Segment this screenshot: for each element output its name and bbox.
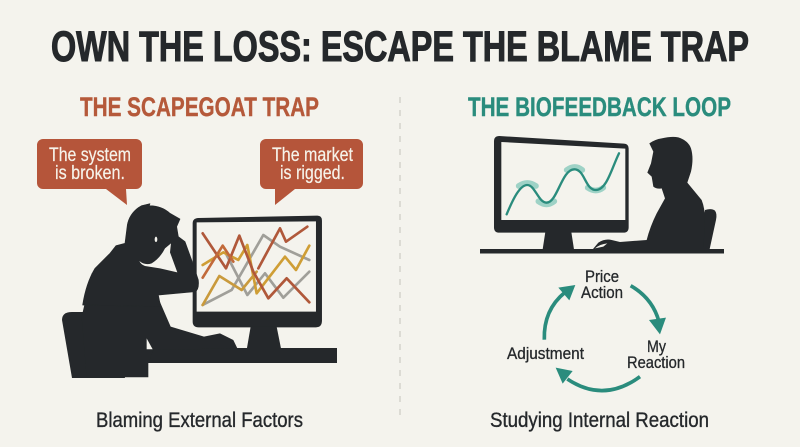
speech bubble: the system is broken: is broken. xyxy=(55,163,125,184)
person lower body xyxy=(82,273,237,377)
arrow: my reaction to adjustment xyxy=(556,368,640,391)
label: price action: Price xyxy=(585,267,619,286)
label: price action xyxy=(581,267,623,302)
label: my reaction: Reaction xyxy=(627,353,685,372)
caption: blaming external factors: Blaming External Factors xyxy=(96,409,303,432)
panel: biofeedback loop xyxy=(468,92,731,432)
desk xyxy=(480,249,724,254)
speech bubble: the system is broken xyxy=(37,139,142,205)
label: adjustment: Adjustment xyxy=(507,344,584,363)
panel: scapegoat trap xyxy=(37,92,363,432)
arrow: price action to my reaction xyxy=(631,286,666,334)
monitor xyxy=(494,136,629,249)
speech bubble: the system is broken: The system xyxy=(49,145,131,166)
arrow: adjustment to price action xyxy=(544,285,575,340)
label: price action: Action xyxy=(581,283,623,302)
icon: calm person at monitor with smooth chart xyxy=(480,136,724,254)
label: my reaction xyxy=(627,337,685,372)
speech bubble: the market is rigged: is rigged. xyxy=(280,163,345,184)
desk xyxy=(147,348,337,363)
caption: studying internal reaction: Studying Internal Reaction xyxy=(490,409,709,432)
speech bubble: the market is rigged: The market xyxy=(272,145,354,166)
cycle diagram xyxy=(544,285,666,391)
chaotic line chart xyxy=(203,227,309,305)
person upper body and head xyxy=(83,204,199,307)
smooth chart with highlights xyxy=(507,153,619,214)
chair xyxy=(62,312,125,378)
speech bubble: the market is rigged xyxy=(260,139,363,205)
icon: stressed person at monitor with chaotic chart xyxy=(62,204,337,378)
heading: the scapegoat trap: THE SCAPEGOAT TRAP xyxy=(80,92,319,122)
monitor xyxy=(193,216,322,350)
chair and person silhouette xyxy=(592,137,716,251)
label: my reaction: My xyxy=(647,337,666,356)
